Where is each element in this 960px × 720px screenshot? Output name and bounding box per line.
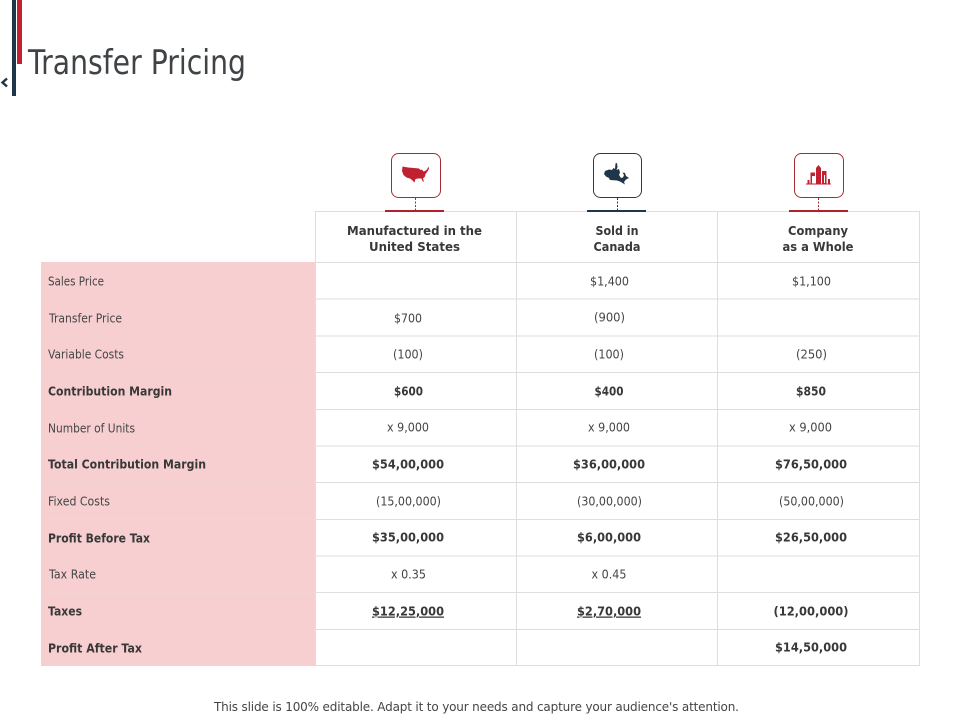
- column values: company as a whole: (12,00,000): [774, 604, 848, 620]
- column values: company as a whole: $1,100: [792, 274, 831, 288]
- row labels: Profit Before Tax: [48, 532, 151, 546]
- column values: sold in Canada: $36,00,000: [573, 458, 645, 472]
- row labels: Taxes: [48, 604, 82, 620]
- row labels: Number of Units: [48, 420, 135, 436]
- column values: manufactured in the United States: x 0.35: [391, 566, 426, 582]
- column icon: Canada map: [587, 154, 646, 212]
- column headers: [347, 224, 854, 255]
- column values: sold in Canada: [573, 274, 645, 620]
- row labels: Fixed Costs: [48, 494, 110, 508]
- column values: sold in Canada: $1,400: [590, 274, 629, 288]
- column headers: Manufactured in the: [347, 224, 482, 239]
- row labels: Total Contribution Margin: [48, 458, 206, 472]
- column values: sold in Canada: x 9,000: [588, 420, 630, 434]
- back chevron: [2, 78, 7, 86]
- column headers: as a Whole: [782, 240, 854, 255]
- column values: manufactured in the United States: [372, 310, 444, 620]
- column values: sold in Canada: $6,00,000: [577, 530, 641, 546]
- column values: manufactured in the United States: (15,00,000): [376, 494, 441, 508]
- row labels: Profit After Tax: [48, 642, 143, 656]
- column headers: Company: [788, 224, 849, 239]
- column values: company as a whole: x 9,000: [789, 420, 832, 434]
- column icon: city buildings: [789, 154, 848, 212]
- column values: manufactured in the United States: $12,25,000: [372, 604, 444, 620]
- column values: company as a whole: $14,50,000: [775, 640, 847, 656]
- column values: sold in Canada: $400: [594, 384, 624, 400]
- row labels: Sales Price: [48, 274, 104, 288]
- table grid: [41, 211, 920, 666]
- column icon: USA map: [385, 154, 444, 212]
- column values: sold in Canada: (100): [594, 346, 624, 362]
- column values: manufactured in the United States: $35,00,000: [372, 530, 444, 546]
- column values: manufactured in the United States: $54,00,000: [372, 458, 444, 472]
- row labels: Variable Costs: [48, 346, 124, 362]
- row labels: Tax Rate: [48, 566, 96, 582]
- row labels: [48, 274, 206, 656]
- column values: company as a whole: (50,00,000): [779, 494, 844, 508]
- column values: manufactured in the United States: x 9,000: [387, 420, 429, 434]
- row labels: Contribution Margin: [48, 384, 172, 400]
- column values: manufactured in the United States: (100): [393, 346, 423, 362]
- column values: manufactured in the United States: $600: [394, 384, 423, 400]
- title: Transfer Pricing: [27, 43, 246, 83]
- column values: manufactured in the United States: $700: [394, 310, 422, 326]
- column values: sold in Canada: x 0.45: [592, 566, 626, 582]
- column headers: Canada: [594, 240, 640, 255]
- column values: company as a whole: $76,50,000: [775, 458, 847, 472]
- row labels: Transfer Price: [48, 310, 122, 326]
- panel: row label background: [41, 262, 315, 666]
- column values: sold in Canada: (30,00,000): [577, 494, 642, 508]
- column values: company as a whole: (250): [796, 346, 827, 362]
- column values: company as a whole: $850: [796, 384, 826, 400]
- column values: sold in Canada: (900): [594, 310, 625, 324]
- column values: company as a whole: [774, 274, 848, 656]
- column values: company as a whole: $26,50,000: [775, 530, 847, 546]
- column headers: Sold in: [596, 224, 638, 239]
- column headers: United States: [369, 240, 460, 255]
- column values: sold in Canada: $2,70,000: [577, 604, 641, 620]
- header accent bars: [12, 0, 22, 96]
- footer note: This slide is 100% editable. Adapt it to your needs and capture your audience's attention.: [213, 700, 739, 714]
